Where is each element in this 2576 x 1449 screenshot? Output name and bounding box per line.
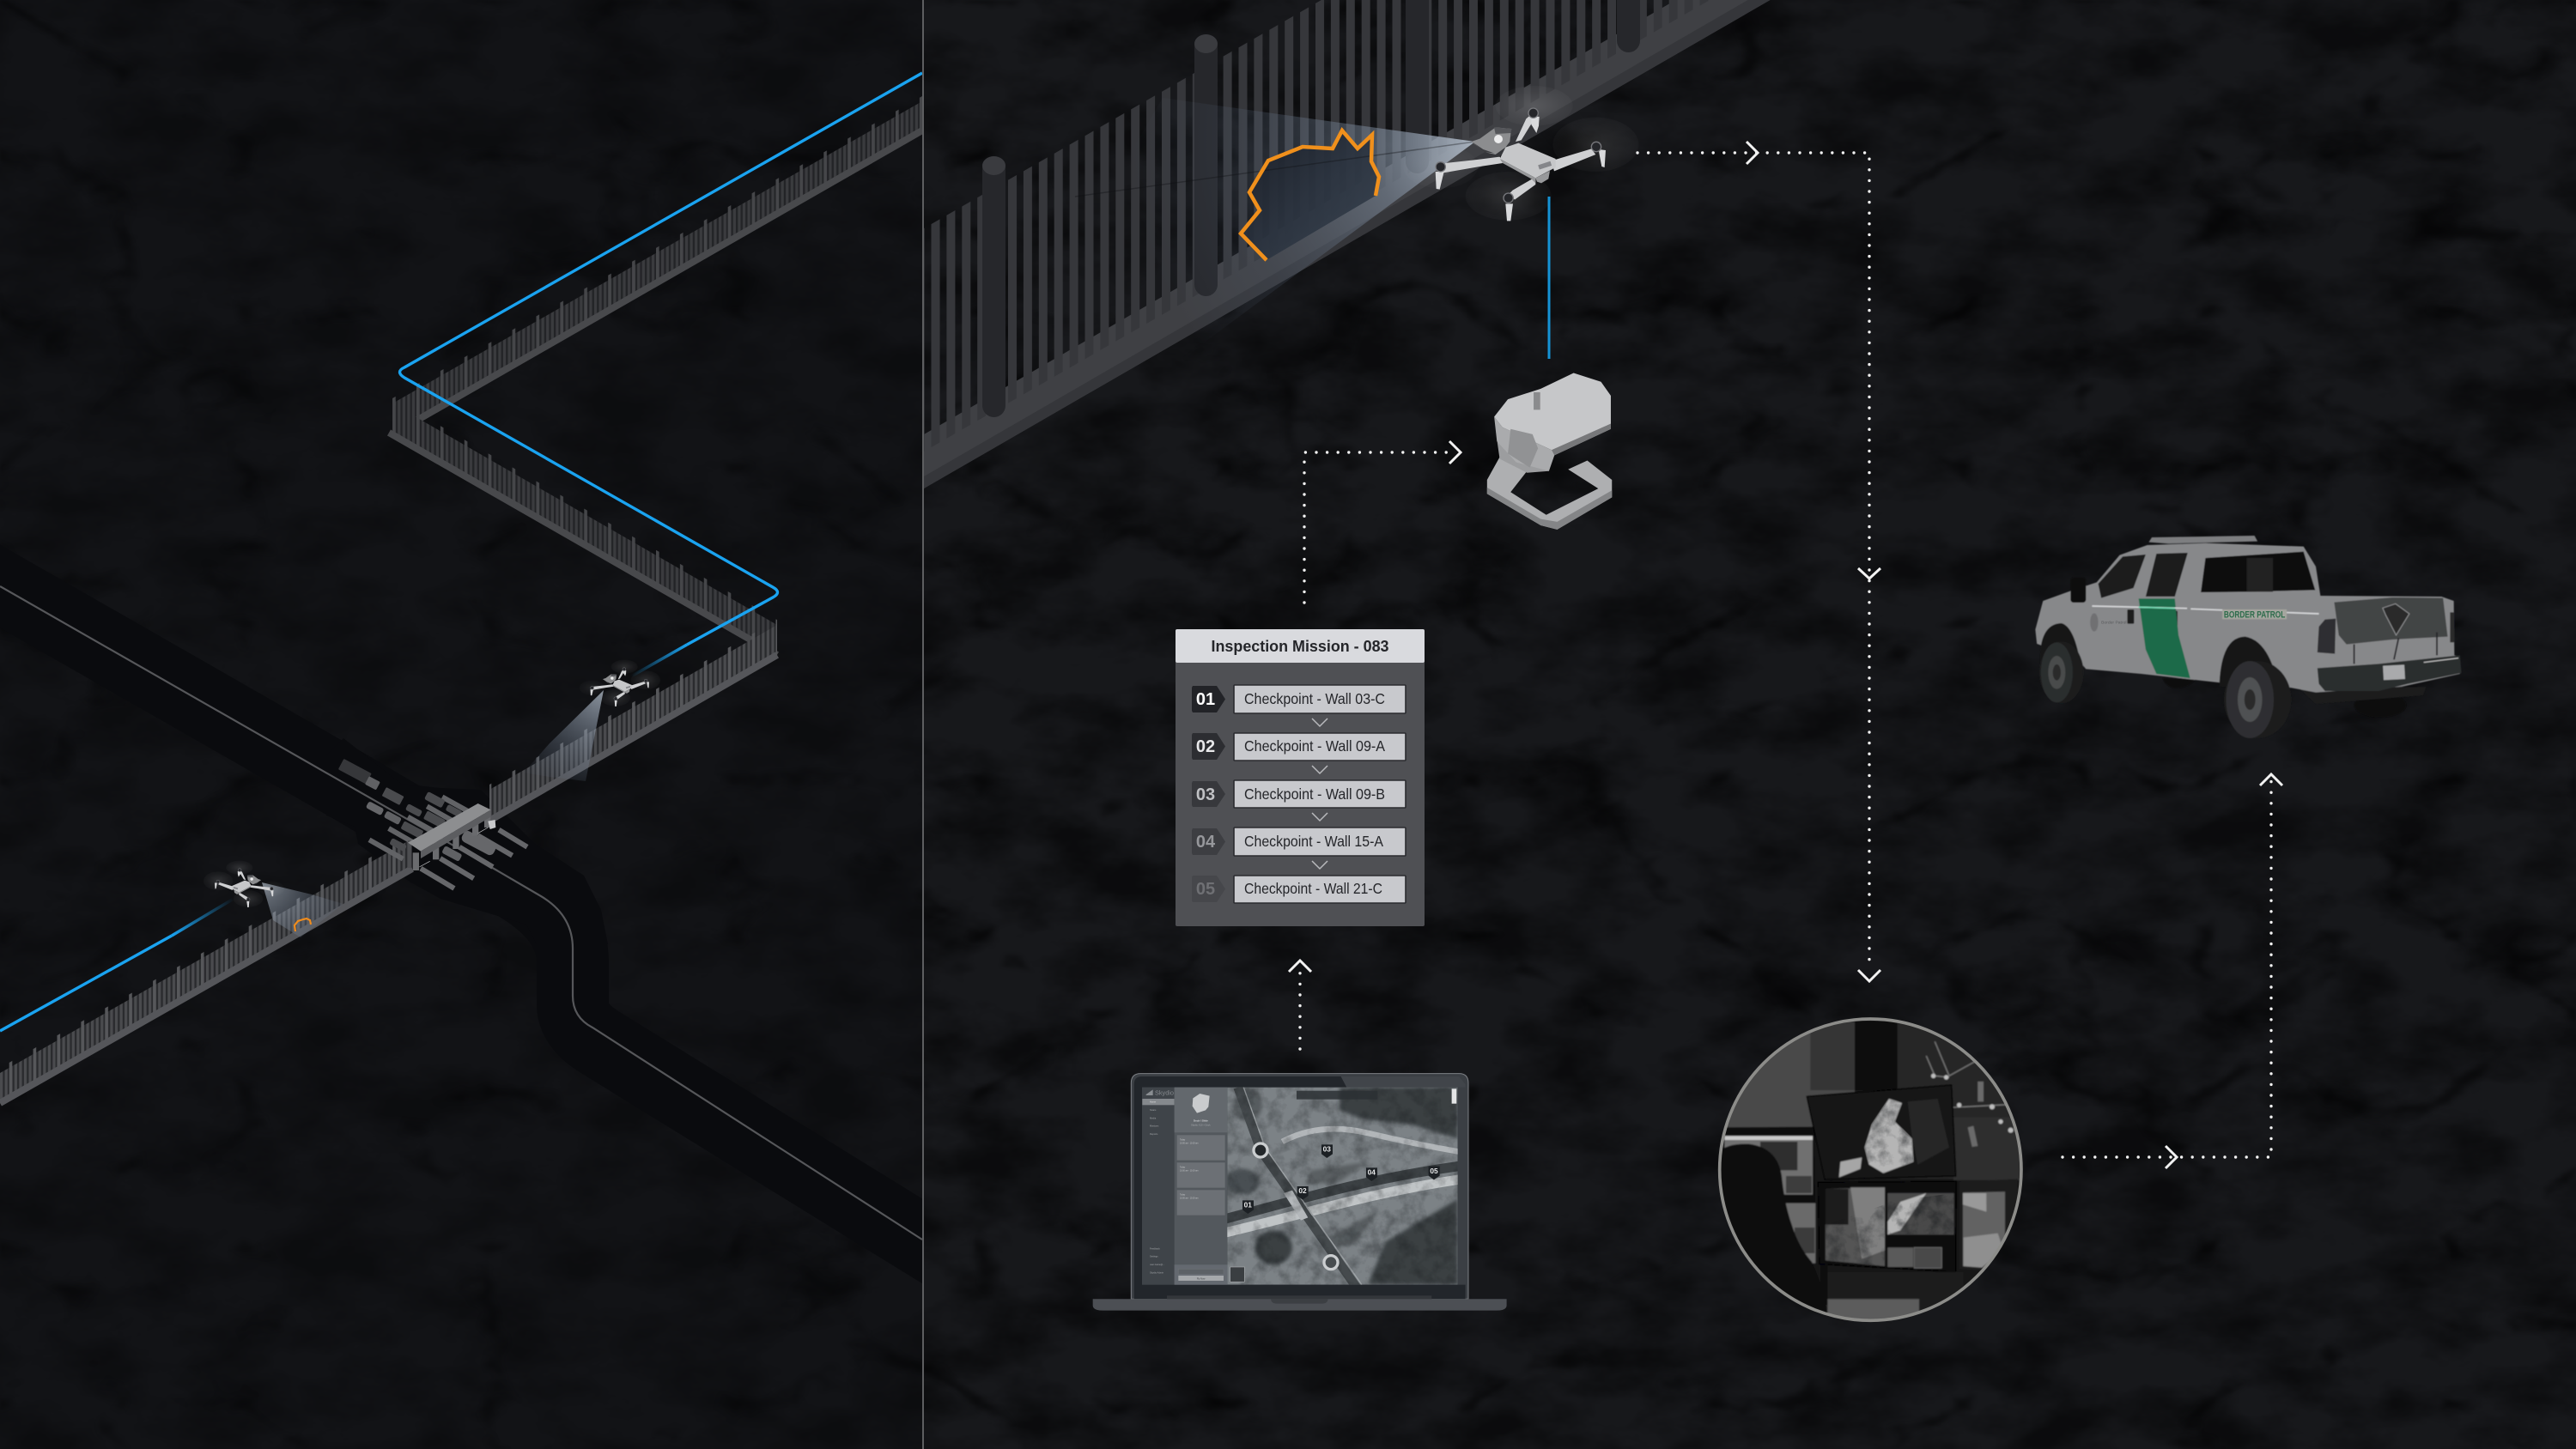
step 02: 02 [1196,737,1215,756]
chevron [1312,813,1327,821]
divider [922,0,924,1449]
sidebar: Missions [1150,1125,1159,1128]
waypoint pins: 02 [1298,1186,1307,1195]
checkpoint plaza with gantry and vehicles [338,759,527,888]
camera light cone [1099,98,1475,385]
border wall: pickets [924,0,1717,452]
operations centre photo [1717,1019,2024,1322]
mission card header [1176,629,1425,663]
details column: Today [1180,1195,1186,1197]
connector: mission to dock [1304,441,1461,603]
laptop lid [1131,1074,1468,1299]
waypoint pins: 04 [1368,1168,1376,1177]
flight path: blue route [0,73,922,1031]
chevron [1312,718,1327,726]
sidebar: Settings [1150,1255,1158,1258]
step 05: Checkpoint - Wall 21-C [1244,880,1382,897]
sidebar: Skydio Admin [1150,1270,1164,1274]
step 01 [1192,685,1406,713]
mission card header: Inspection Mission - 083 [1211,637,1389,655]
highlights [2092,606,2319,614]
step 04: 04 [1196,833,1216,852]
road: dark corridor [0,567,953,1260]
step 01: 01 [1196,690,1215,709]
wall: lower left segment [0,834,412,1103]
details column: Skydio X10 + Dock [1191,1124,1211,1127]
truck body [2035,543,2460,693]
details column: Dock / Slide [1194,1119,1208,1123]
inspection drone [1403,86,1638,221]
wall: middle segment [389,398,777,655]
border wall: posts [982,0,1640,417]
step 04 [1192,828,1406,856]
bottom centre monitor [1818,1181,1956,1272]
chevron [1312,766,1327,773]
front wheel [2039,641,2083,703]
roof light bar [2148,536,2257,543]
step 04: Checkpoint - Wall 15-A [1244,833,1383,850]
aerial map with waypoints [1225,1088,1460,1288]
step 03: 03 [1196,785,1215,804]
waypoint pins [1242,1144,1440,1214]
details column: Fly Now [1197,1276,1206,1280]
border wall: base slab [924,0,1812,488]
step 05: 05 [1196,880,1215,899]
drone B with camera cone and anomaly marker [204,861,343,937]
details column: 10:00 am - 10:30 am [1180,1171,1199,1173]
right monitor [1959,1179,2018,1273]
data link: drone to dock [1547,197,1551,359]
waypoint pins: 05 [1430,1167,1438,1175]
details column: Today [1180,1167,1186,1169]
drone A with camera cone [524,660,660,781]
left monitor [1723,1127,1815,1202]
sidebar [1142,1088,1175,1285]
wall: upper segment [392,96,922,434]
wheel arches [2040,623,2081,670]
operator silhouette [1717,1144,1829,1322]
details column: 10:00 am - 10:30 am [1180,1143,1199,1145]
step 05 [1192,876,1406,903]
panel: inspection workflow [924,0,2576,1449]
waypoint pins: 03 [1323,1145,1331,1154]
door insignia caption: Border Patrol [2101,621,2127,626]
laptop: mission control software [1093,1074,1507,1311]
mission card [1176,629,1425,926]
sidebar: Feedback [1150,1246,1160,1250]
laptop base [1093,1299,1507,1311]
windows [2070,552,2315,627]
rear wheel [2224,661,2291,738]
sidebar: user.name@... [1150,1263,1165,1266]
details column: Today [1180,1140,1186,1142]
sidebar: Media [1150,1116,1157,1119]
tailgate cover [2334,597,2448,645]
details column [1175,1088,1227,1285]
connector: wall to operations [1637,142,1880,981]
step 02: Checkpoint - Wall 09-A [1244,737,1385,755]
door lettering: BORDER PATROL [2224,610,2285,620]
arrow: right [1747,142,1758,164]
desk [1820,1272,1964,1322]
step 03 [1192,780,1406,808]
docking station [1487,373,1612,530]
bumper [2318,655,2462,691]
sidebar: Skydio [1155,1088,1174,1096]
top centre monitor [1807,1085,1956,1179]
sidebar: Reports [1150,1132,1158,1136]
panel: border network overview [0,0,953,1449]
wall: lower right segment [489,620,777,821]
green stripe [2139,598,2190,678]
connector: operations to truck [2063,774,2282,1168]
sidebar: Home [1150,1100,1157,1104]
step 02 [1192,733,1406,761]
chevron [1312,861,1327,869]
step 01: Checkpoint - Wall 03-C [1244,690,1385,707]
border patrol truck [2035,536,2462,738]
details column: 10:00 am - 10:30 am [1180,1198,1199,1200]
waypoint pins: 01 [1244,1200,1252,1209]
sidebar: Scans [1150,1108,1157,1112]
step 03: Checkpoint - Wall 09-B [1244,785,1385,803]
anomaly: breach in wall [1075,130,1475,260]
connector: laptop to mission [1289,961,1311,1049]
